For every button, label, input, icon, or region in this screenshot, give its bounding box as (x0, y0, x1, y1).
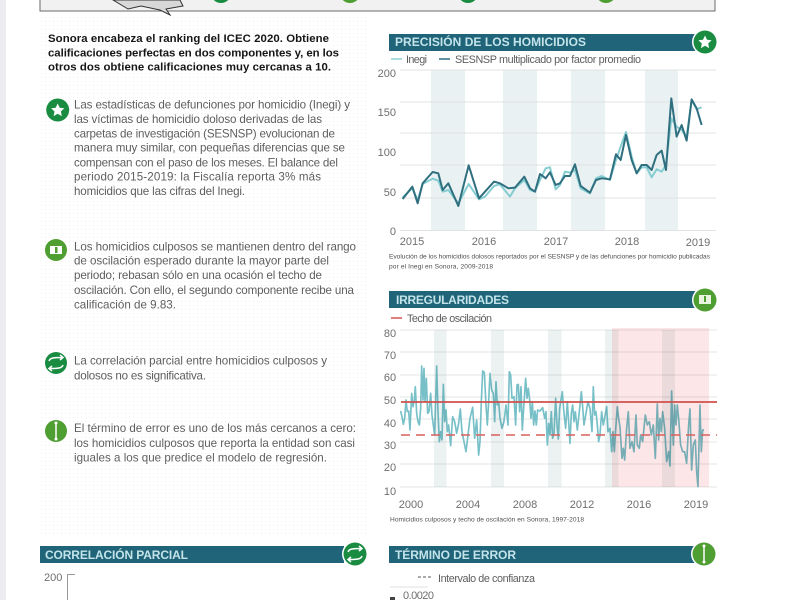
panel: partial correlation (40, 541, 368, 600)
line: dashed floor (401, 434, 717, 436)
panel: top ranking box (40, 0, 715, 15)
y axis labels: 70 (384, 350, 396, 362)
heading: correlation: CORRELACIÓN PARCIAL (45, 547, 188, 562)
chart bands (431, 70, 678, 231)
heading: precision (389, 34, 695, 51)
caption: Evolución de los homicidios dolosos reportados por el SESNSP y de las defunciones por homicidio publicadas (389, 254, 711, 260)
y axis labels: 150 (378, 107, 396, 119)
legend: Inegi (406, 54, 427, 66)
text block: error term: El término de error es uno de los más cercanos a cero: (74, 422, 356, 435)
y axis labels: 100 (378, 147, 396, 159)
heading: error term: TÉRMINO DE ERROR (395, 547, 516, 562)
y axis labels: 50 (384, 395, 396, 407)
text block: error term: los homicidios culposos que reporta la entidad son casi (74, 437, 355, 450)
line: SESNSP (403, 98, 702, 206)
text block: irregularities: Los homicidios culposos se mantienen dentro del rango (74, 241, 356, 254)
x axis labels: 2000 (399, 499, 423, 511)
text block: correlation: dolosos no es significativa. (74, 370, 206, 383)
line: Inegi (403, 100, 702, 203)
text block: precision: homicidios que las cifras del Inegi. (74, 185, 245, 198)
y axis labels (384, 328, 396, 498)
x axis labels: 2004 (456, 499, 480, 511)
icon: green circle 4 (596, 0, 616, 3)
x axis labels: 2016 (472, 236, 496, 248)
text block: irregularities: calificación de 9.83. (74, 298, 176, 311)
y axis labels: 60 (384, 372, 396, 384)
legend: Intervalo de confianza (438, 573, 535, 585)
y axis labels: 40 (384, 418, 396, 430)
text block: irregularities: periodo; rebasan sólo en una ocasión el techo de (74, 269, 322, 282)
y axis labels: 10 (384, 486, 396, 498)
line: ceiling (401, 401, 717, 403)
heading: summary: Sonora encabeza el ranking del ICEC 2020. Obtiene (48, 33, 329, 45)
text block: precision: Las estadísticas de defunciones por homicidio (Inegi) y (74, 98, 350, 111)
heading: summary: otros dos obtiene calificaciones muy cercanas a 10. (48, 62, 331, 74)
icon: book (45, 239, 67, 261)
text block: irregularities: oscilación. Con ello, el segundo componente recibe una (74, 284, 355, 297)
y axis labels: 20 (384, 462, 396, 474)
x axis labels (400, 236, 710, 249)
x axis labels: 2019 (684, 499, 708, 511)
icon: star badge (692, 29, 718, 55)
x axis labels: 2019 (686, 237, 710, 249)
icon: arrows (45, 352, 67, 374)
text block: correlation: La correlación parcial entre homicidios culposos y (74, 355, 327, 368)
icon: green circle 3 (458, 0, 478, 3)
y axis labels: 50 (384, 187, 396, 199)
heading: precision: PRECISIÓN DE LOS HOMICIDIOS (395, 34, 586, 49)
axis label: 200 (44, 572, 62, 584)
heading: correlation (40, 546, 344, 563)
icon: book badge (692, 287, 718, 313)
panel: error term (389, 541, 717, 600)
icon: vertical arrow (45, 420, 67, 442)
y axis labels (378, 68, 396, 238)
heading: irregularities: IRREGULARIDADES (396, 293, 509, 307)
y axis labels: 30 (384, 440, 396, 452)
x axis labels: 2012 (570, 499, 594, 511)
text block: precision: manera muy similar, con pequeñas diferencias que se (74, 142, 345, 155)
chart bands (434, 330, 675, 487)
x axis labels (399, 499, 708, 511)
icon: green circle 2 (340, 0, 360, 3)
text block: irregularities: de oscilación esperado durante la mayor parte del (74, 255, 329, 268)
heading: error term (389, 546, 695, 563)
panel: precision chart (378, 29, 718, 270)
legend: SESNSP multiplicado por factor promedio (455, 54, 641, 66)
x axis labels: 2017 (544, 236, 568, 248)
icon: green circle 1 (211, 0, 231, 3)
y axis labels: 80 (384, 328, 396, 340)
x axis labels: 2008 (513, 499, 537, 511)
legend: Techo de oscilación (407, 313, 492, 325)
y axis labels: 200 (378, 68, 396, 80)
caption: Homicidios culposos y techo de oscilación en Sonora, 1997-2018 (390, 516, 584, 524)
heading: summary: calificaciones perfectas en dos componentes y, en los (48, 47, 339, 59)
line: culposos (401, 366, 704, 487)
heading: irregularities (389, 291, 695, 308)
text block: error term: iguales a los que predice el modelo de regresión. (74, 452, 327, 465)
text block: precision (74, 98, 350, 198)
highlight: pink period (612, 328, 709, 487)
icon: Sonora map (113, 0, 183, 15)
panel: irregularities chart (384, 287, 718, 524)
caption: por el Inegi en Sonora, 2009-2018 (389, 264, 493, 270)
text block: precision: las víctimas de homicidio doloso derivadas de las (74, 113, 322, 126)
heading: summary (48, 33, 339, 74)
icon: star (46, 98, 69, 122)
caption (389, 254, 711, 270)
text block: precision: carpetas de investigación (SESNSP) evolucionan de (74, 127, 335, 140)
text block: error term (74, 422, 356, 465)
text block: precision: compensan con el paso de los meses. El balance del (74, 156, 338, 169)
x axis labels: 2016 (627, 499, 651, 511)
marker (390, 597, 395, 600)
y axis labels: 0 (390, 226, 396, 238)
x axis labels: 2015 (400, 236, 424, 248)
x axis labels: 2018 (615, 236, 639, 248)
icon: vertical arrow badge (691, 541, 717, 567)
text block: precision: periodo 2015-2019: la Fiscalía reporta 3% más (74, 171, 321, 184)
text block: irregularities (74, 241, 356, 311)
text block: correlation (74, 355, 327, 383)
axis (68, 574, 75, 600)
icon: arrows badge (342, 541, 368, 567)
